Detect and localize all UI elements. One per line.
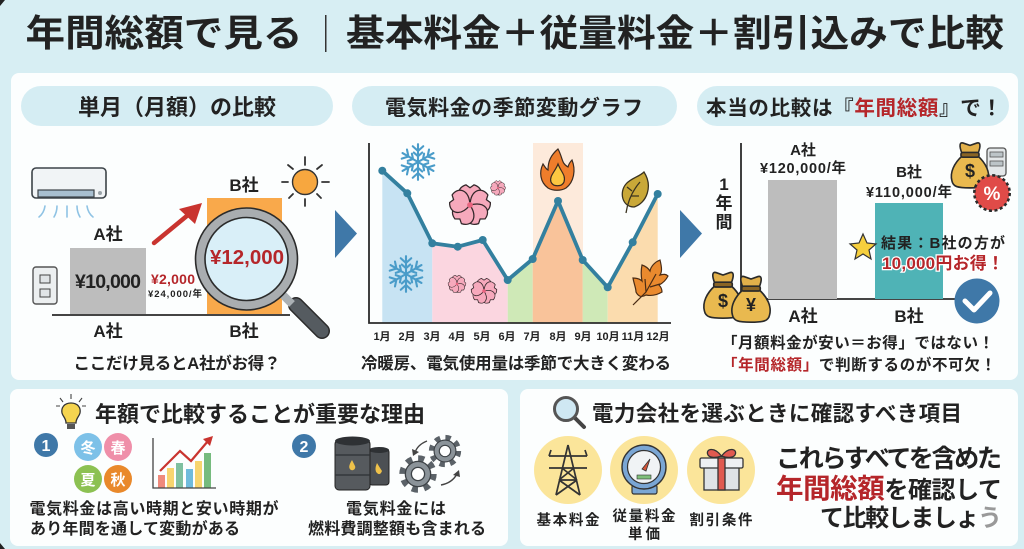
axis label: one year: 年 <box>716 193 732 213</box>
bar: company B monthly <box>207 176 282 314</box>
icon: star <box>850 234 876 259</box>
text: reason 1: 電気料金は高い時期と安い時期が <box>30 499 278 518</box>
icon: dollar bag <box>704 272 742 318</box>
arrow: price increase <box>154 203 202 243</box>
title: 基本料金＋従量料金＋割引込みで比較 <box>346 13 1004 54</box>
bar: company A annual <box>760 142 846 299</box>
month labels: 12月 <box>646 330 670 343</box>
icon: dollar bag: $ <box>718 291 728 311</box>
icon: four seasons: 秋 <box>110 472 126 489</box>
heading pill: annual total <box>697 86 1009 126</box>
panel: main comparison <box>11 73 1018 380</box>
bar: company A annual: ¥120,000/年 <box>760 159 846 177</box>
item: base fee: 基本料金 <box>536 511 600 529</box>
bar: company B annual: ¥110,000/年 <box>866 183 952 201</box>
item: discount terms: 割引条件 <box>690 512 752 529</box>
baseline <box>52 314 290 316</box>
labels: companies: B社 <box>229 322 259 341</box>
text: reason 2: 燃料費調整額も含まれる <box>308 519 486 538</box>
closing message: これらすべてを含めた <box>776 445 1002 473</box>
icon: dollar bag top <box>951 143 989 188</box>
arrow: step one to two <box>335 210 357 258</box>
heading: reasons: 年額で比較することが重要な理由 <box>95 402 425 427</box>
axes <box>741 143 960 299</box>
icon: yellow leaf <box>622 172 648 213</box>
icon: wall outlet <box>33 267 57 304</box>
icon: meter <box>622 445 666 494</box>
icon: magnifier with price: ¥12,000 <box>210 246 284 269</box>
month labels: 4月 <box>448 330 466 343</box>
heading pill: monthly comparison: 単月（月額）の比較 <box>78 95 276 120</box>
caption: annual total: 「月額料金が安い＝お得」ではない！ <box>722 333 994 352</box>
axis label: one year: 1 <box>719 175 729 194</box>
bar: company A monthly: ¥10,000 <box>75 271 141 293</box>
icon: gears <box>403 438 460 489</box>
labels: companies <box>788 307 924 326</box>
month labels: 5月 <box>473 330 491 343</box>
icon: four seasons: 夏 <box>80 472 96 489</box>
result callout: 10,000円お得！ <box>882 254 1004 273</box>
closing message <box>776 445 1002 532</box>
item: discount terms <box>687 436 755 529</box>
icon: maple leaf <box>633 260 668 305</box>
caption: annual total <box>722 333 996 374</box>
caption: monthly comparison: ここだけ見るとA社がお得？ <box>74 353 280 373</box>
panel: annual total <box>697 86 1010 374</box>
panel: checklist <box>520 389 1018 546</box>
price difference: ¥24,000/年 <box>148 288 202 300</box>
icon: check badge <box>954 278 1000 324</box>
heading pill: annual total: 本当の比較は『年間総額』で！ <box>706 97 1002 120</box>
icon: percent badge <box>974 176 1010 210</box>
title <box>26 13 1004 54</box>
item: base fee <box>534 436 602 529</box>
price difference <box>148 271 202 300</box>
month labels: 7月 <box>523 330 541 343</box>
axis label: one year: 間 <box>716 213 732 232</box>
icon: calculator <box>987 148 1006 176</box>
item: usage rate <box>610 436 678 543</box>
closing message: て比較しましょう <box>820 505 1002 532</box>
icon: snowflake lower <box>388 256 424 292</box>
bar: company A annual: A社 <box>790 142 816 159</box>
labels: companies: B社 <box>894 307 924 326</box>
bar: company B annual <box>866 164 952 299</box>
labels: companies: A社 <box>788 307 818 326</box>
axes <box>369 143 671 323</box>
panel: seasonal chart <box>352 86 677 373</box>
month labels: 11月 <box>622 330 644 343</box>
icon: large cherry blossom <box>447 185 493 228</box>
icon: oil barrels <box>335 436 389 490</box>
caption: annual total: 「年間総額」で判断するのが不可欠！ <box>722 355 996 374</box>
icon: rising bar chart <box>153 436 216 488</box>
bar: company A monthly <box>70 225 146 314</box>
heading pill: monthly comparison <box>21 86 333 126</box>
text: reason 1: あり年間を通して変動がある <box>30 519 240 538</box>
data line <box>378 167 662 291</box>
icon: four seasons <box>74 433 132 493</box>
number badge 2: 2 <box>300 439 309 456</box>
reason 1 <box>30 433 278 538</box>
labels: companies <box>93 322 259 341</box>
icon: yen bag: ¥ <box>746 295 756 315</box>
heading pill: seasonal chart <box>352 86 677 126</box>
closing message: 年間総額を確認して <box>776 473 1002 504</box>
heading: reasons <box>56 394 425 429</box>
text: reason 2: 電気料金には <box>346 499 446 518</box>
item: usage rate: 単価 <box>628 525 660 543</box>
bar: company B annual: B社 <box>896 164 922 181</box>
icon: percent badge: % <box>984 184 1001 205</box>
panel: reasons <box>10 389 508 546</box>
image corners <box>0 0 5 549</box>
bar: company A monthly: A社 <box>93 225 123 244</box>
labels: companies: A社 <box>93 322 123 341</box>
item: usage rate: 従量料金 <box>612 507 676 525</box>
icon: snowflake upper <box>400 144 436 180</box>
result callout: 結果：B社の方が <box>881 234 1005 252</box>
month labels: 2月 <box>398 330 416 343</box>
number badge 1 <box>34 433 58 457</box>
icon: cherry blossom bottom <box>470 278 498 305</box>
chart: monthly electricity bill <box>369 143 671 343</box>
heading pill: seasonal chart: 電気料金の季節変動グラフ <box>385 96 643 120</box>
number badge 2 <box>292 434 316 458</box>
caption: seasonal chart: 冷暖房、電気使用量は季節で大きく変わる <box>361 353 671 373</box>
icon: gift box <box>700 449 743 490</box>
icon: flame <box>541 149 574 190</box>
icon: yen bag <box>732 276 770 322</box>
axis label: one year <box>716 175 732 232</box>
season areas <box>382 171 658 323</box>
result callout <box>881 234 1005 273</box>
number badge 1: 1 <box>42 438 51 455</box>
icon: small cherry blossom left <box>447 275 467 294</box>
reason 2 <box>292 434 486 538</box>
icon: power tower <box>549 445 587 495</box>
icon: air conditioner <box>32 168 106 217</box>
title: 年間総額で見る <box>26 13 302 54</box>
bar: company B monthly: B社 <box>229 176 259 195</box>
icon: four seasons: 冬 <box>80 439 96 457</box>
icon: sun <box>282 157 329 206</box>
month labels: 10月 <box>596 330 620 343</box>
month labels: 1月 <box>373 330 391 343</box>
panel: monthly comparison <box>21 86 333 373</box>
month labels <box>373 330 670 343</box>
month labels: 3月 <box>423 330 441 343</box>
arrow: step two to three <box>680 210 702 258</box>
icon: small cherry blossom top <box>490 181 506 196</box>
price difference: ¥2,000 <box>151 271 195 287</box>
summer band <box>533 143 583 323</box>
month labels: 6月 <box>498 330 516 343</box>
text: reason 1 <box>30 499 278 538</box>
heading: checklist: 電力会社を選ぶときに確認すべき項目 <box>592 402 962 426</box>
month labels: 8月 <box>549 330 567 343</box>
icon: four seasons: 春 <box>110 439 126 457</box>
icon: magnifier with price <box>196 208 322 331</box>
month labels: 9月 <box>574 330 592 343</box>
icon: dollar bag top: $ <box>965 161 975 181</box>
text: reason 2 <box>308 499 486 538</box>
